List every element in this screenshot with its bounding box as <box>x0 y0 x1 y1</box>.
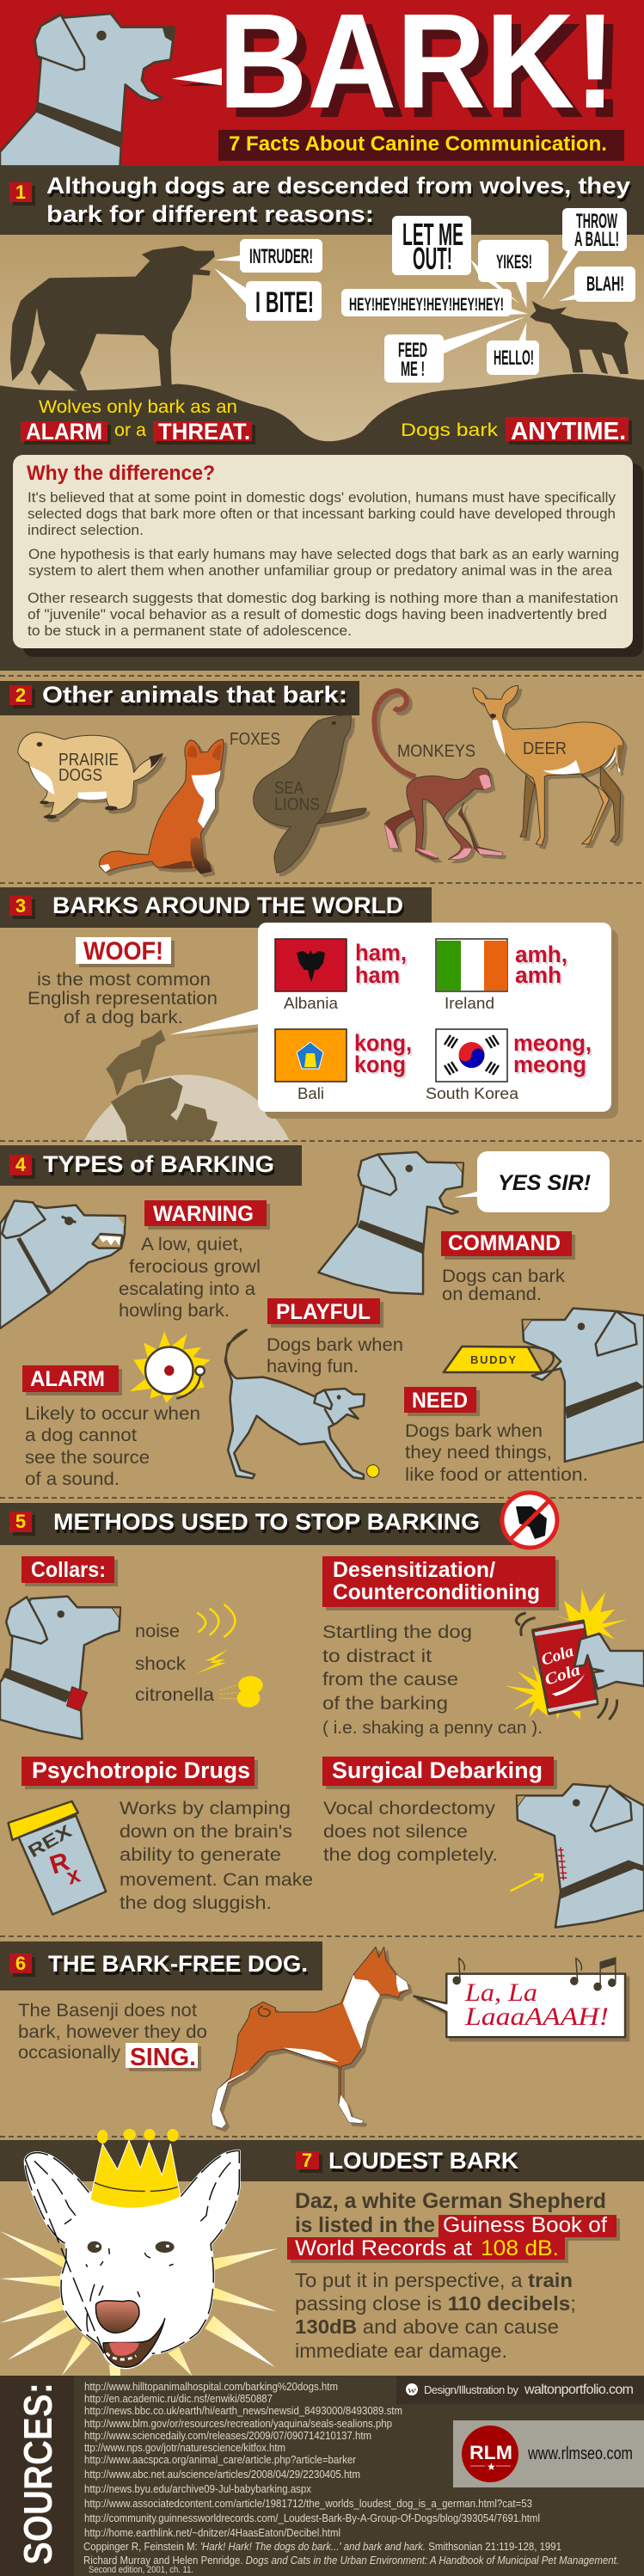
text: psychotropic drugs: movement. Can make <box>120 1870 313 1890</box>
flag: Bali: kong <box>354 1052 406 1077</box>
source list: http://news.byu.edu/archive09-Jul-babybarking.aspx <box>84 2482 311 2495</box>
number badge 6: 6 <box>15 1953 26 1974</box>
paragraph 2: system to alert them when another unfamiliar group or predatory animal was in the area <box>28 562 613 579</box>
caption: wolves: or a <box>114 420 146 440</box>
bubble: intruder: INTRUDER! <box>249 245 313 268</box>
text: alarm <box>25 1404 200 1489</box>
caption: wolves <box>21 397 252 445</box>
text: perspective <box>295 2269 576 2362</box>
collar type: noise <box>135 1604 235 1641</box>
number badge 1 <box>9 181 32 203</box>
text: alarm: Likely to occur when <box>25 1404 200 1424</box>
collar type: shock: shock <box>135 1654 187 1674</box>
section 6: the bark-free dog <box>0 1941 625 2128</box>
heading 5: METHODS USED TO STOP BARKING <box>53 1509 480 1535</box>
woof description <box>28 970 218 1027</box>
white shepherd head with crown <box>25 2129 239 2368</box>
section 1: wolves vs dogs <box>0 166 644 462</box>
text: warning <box>119 1235 261 1321</box>
heading 1 <box>46 173 630 227</box>
paragraph 2: One hypothesis is that early humans may have selected dogs that bark as an early warning <box>28 546 619 562</box>
caption: dogs: Dogs bark <box>401 420 499 440</box>
dog: surgical scar <box>511 1784 644 1928</box>
label: alarm: ALARM <box>30 1367 105 1391</box>
sources heading: SOURCES: <box>15 2383 60 2565</box>
bubble: hello <box>487 340 539 375</box>
bubble: yikes <box>478 240 549 282</box>
text: surgical debarking: the dog completely. <box>323 1845 498 1865</box>
source list: http://www.associatedcontent.com/article/1981712/the_worlds_loudest_dog_is_a_german.html?cat=53 <box>84 2497 532 2510</box>
section 3: barks around the world <box>0 887 618 1141</box>
highlight: guinness record: World Records at <box>295 2236 472 2260</box>
text: perspective: 130dB and above can cause <box>295 2315 559 2338</box>
bubble: feed me: FEED <box>398 339 427 362</box>
flag: South Korea: meong, <box>513 1030 592 1056</box>
paragraph 1 <box>28 489 616 538</box>
number badge 2 <box>9 684 32 706</box>
flag: Bali: Bali <box>297 1085 324 1102</box>
highlight: guinness record <box>287 2213 616 2260</box>
text: desensitization: Startling the dog <box>322 1622 472 1642</box>
source list: http://www.blm.gov/or/resources/recreation/yaquina/seals-sealions.php <box>84 2417 392 2430</box>
animal: prairie dog: PRAIRIE <box>58 751 119 770</box>
label: desensitization <box>322 1556 555 1607</box>
text: need: like food or attention. <box>405 1465 588 1485</box>
text: need <box>405 1421 588 1485</box>
flag: Ireland: amh <box>515 962 561 988</box>
hills <box>0 374 644 462</box>
text: surgical debarking: Vocal chordectomy <box>323 1799 496 1819</box>
paragraph 3: of "juvenile" vocal behavior as a result of domestic dogs having been inadvertently bred <box>28 606 607 623</box>
caption: wolves: Wolves only bark as an <box>39 397 237 417</box>
number badge 3: 3 <box>15 895 26 917</box>
label: desensitization: Desensitization/ <box>333 1558 495 1582</box>
card: barks by country <box>169 923 618 1119</box>
sponsor logo: RLM: RLM <box>469 2442 512 2463</box>
bubble: hey hey <box>341 289 512 316</box>
text: daz <box>295 2189 606 2237</box>
flag: Albania: ham <box>355 962 400 988</box>
icon: shaking penny can: Cola <box>543 1661 583 1690</box>
bubble: la la la: La, La <box>464 1978 537 2007</box>
label: warning: WARNING <box>153 1202 254 1226</box>
icon: barking dog <box>0 14 222 166</box>
paragraph 1: It's believed that at some point in domestic dogs' evolution, humans must have specifically <box>28 489 616 506</box>
number badge 2: 2 <box>15 684 26 706</box>
flag: Albania <box>275 939 407 1012</box>
animal: sea lion <box>254 715 366 873</box>
woof description: English representation <box>28 989 218 1009</box>
collar type: shock <box>135 1649 228 1674</box>
paragraph 1: indirect selection. <box>28 522 144 538</box>
text: surgical debarking <box>323 1799 498 1865</box>
text: psychotropic drugs: ability to generate <box>120 1845 281 1865</box>
text: psychotropic drugs: Works by clamping <box>120 1799 291 1819</box>
flag: South Korea <box>426 1029 592 1102</box>
subtitle: 7 Facts About Canine Communication. <box>229 132 607 156</box>
dog: need with tag <box>444 1309 644 1462</box>
text: alarm: a dog cannot <box>25 1426 137 1445</box>
text: perspective: immediate ear damage. <box>295 2340 507 2362</box>
flag: Bali: kong, <box>354 1030 412 1056</box>
number badge 4: 4 <box>15 1154 27 1175</box>
text: basenji: occasionally <box>18 2043 121 2063</box>
wolf silhouette <box>10 246 215 393</box>
bubble: i bite: I BITE! <box>255 286 314 319</box>
text: desensitization: from the cause <box>322 1670 458 1690</box>
source list: http://home.earthlink.net/~dnitzer/4HaasEaton/Decibel.html <box>84 2526 340 2539</box>
text: basenji: The Basenji does not <box>18 2001 197 2021</box>
text: warning: ferocious growl <box>129 1257 261 1277</box>
bubble: let me out <box>392 216 471 276</box>
animal: prairie dog: DOGS <box>58 766 102 785</box>
text: psychotropic drugs <box>120 1799 313 1913</box>
panel heading: Why the difference? <box>27 462 215 485</box>
bubble: yikes: YIKES! <box>496 251 532 273</box>
number badge 5 <box>9 1511 32 1532</box>
number badge 5: 5 <box>15 1511 26 1532</box>
callout: woof: WOOF! <box>83 937 163 966</box>
caption: wolves: ALARM <box>26 419 102 445</box>
woof description: is the most common <box>37 970 211 990</box>
animal: deer <box>473 685 623 845</box>
dog: playful with ball <box>225 1330 379 1479</box>
heading 3: BARKS AROUND THE WORLD <box>52 892 403 918</box>
animal: sea lion: LIONS <box>274 795 320 814</box>
text: basenji <box>18 2001 207 2071</box>
flag: Bali <box>275 1029 412 1102</box>
heading 2: Other animals that bark: <box>42 682 347 708</box>
flag: Albania: ham, <box>355 940 407 966</box>
icon: shaking penny can: Cola <box>539 1642 576 1670</box>
animal: prairie dog <box>18 733 163 819</box>
section 4: types of barking <box>0 1145 644 1489</box>
bubble: yes sir: YES SIR! <box>498 1171 591 1195</box>
heading 6: THE BARK-FREE DOG. <box>48 1951 308 1977</box>
text: warning: A low, quiet, <box>141 1235 243 1254</box>
number badge 1: 1 <box>15 181 26 203</box>
source list <box>83 2380 619 2575</box>
animal: fox: FOXES <box>230 730 280 749</box>
text: desensitization <box>322 1622 543 1738</box>
sponsor logo: RLM <box>453 2420 644 2487</box>
bubble: let me out: OUT! <box>413 241 452 276</box>
source list: http://www.hilltopanimalhospital.com/barking%20dogs.htm <box>84 2380 338 2393</box>
text: surgical debarking: does not silence <box>323 1822 468 1842</box>
label: command: COMMAND <box>448 1231 561 1255</box>
text: playful: having fun. <box>267 1357 359 1377</box>
number badge 3 <box>9 895 32 917</box>
number badge 6 <box>9 1953 32 1974</box>
text: desensitization: ( i.e. shaking a penny can ). <box>322 1719 543 1738</box>
icon: prescription bottle: R <box>46 1847 73 1880</box>
text: playful: Dogs bark when <box>267 1335 403 1355</box>
caption: dogs <box>401 417 629 445</box>
text: warning: escalating into a <box>119 1279 255 1299</box>
paragraph 3: to be stuck in a permanent state of adolescence. <box>28 623 352 639</box>
icon: no barking sign <box>502 1493 557 1548</box>
text: warning: howling bark. <box>119 1301 230 1321</box>
text: desensitization: of the barking <box>322 1694 448 1714</box>
woof description: of a dog bark. <box>64 1008 183 1027</box>
sponsor logo: RLM: ★ <box>487 2461 496 2473</box>
section 7: loudest bark <box>0 2129 644 2376</box>
highlight: guinness record: Guiness Book of <box>443 2213 607 2237</box>
paragraph 3 <box>28 590 618 639</box>
text: perspective: To put it in perspective, a train <box>295 2269 573 2291</box>
text: daz: Daz, a white German Shepherd <box>295 2189 606 2213</box>
speech bubble tails <box>214 249 580 354</box>
icon: prescription bottle <box>9 1801 106 1915</box>
text: basenji: bark, however they do <box>18 2022 207 2042</box>
bubble: la la la <box>414 1974 625 2037</box>
bubble: blah <box>574 267 635 302</box>
text: daz: is listed in the <box>295 2213 435 2237</box>
icon: prescription bottle: x <box>64 1861 83 1890</box>
animal: monkey <box>374 690 503 860</box>
panel: why the difference <box>0 455 644 671</box>
label: playful: PLAYFUL <box>276 1300 371 1324</box>
bubble: intruder <box>240 239 322 273</box>
bubble: i bite <box>246 281 322 321</box>
bubble: hey hey: HEY!HEY!HEY!HEY!HEY!HEY! <box>349 295 504 315</box>
source list: ttp://www.nps.gov/jotr/naturescience/kitfox.htm <box>84 2441 285 2454</box>
globe with howling dog <box>84 1029 290 1141</box>
flag: Ireland <box>436 939 567 1012</box>
dog: command <box>318 1152 463 1294</box>
icon: prescription bottle: REX <box>25 1821 75 1861</box>
animal: sea lion: SEA <box>274 779 304 798</box>
icon: alarm bell <box>130 1331 211 1403</box>
dog: warning <box>0 1201 126 1328</box>
label: surgical debarking: Surgical Debarking <box>332 1757 543 1783</box>
text: alarm: of a sound. <box>25 1469 120 1489</box>
flag: South Korea: South Korea <box>426 1085 519 1102</box>
bubble: feed me <box>384 334 444 383</box>
header banner <box>0 0 644 166</box>
sources footer <box>0 2376 644 2576</box>
text: desensitization: to distract it <box>322 1647 432 1666</box>
animal: monkey: MONKEYS <box>397 742 475 761</box>
flag: South Korea: meong <box>513 1052 586 1077</box>
heading 1: bark for different reasons: <box>46 201 374 227</box>
animal: fox <box>100 730 280 874</box>
paragraph 2 <box>28 546 619 579</box>
collar type: noise: noise <box>135 1622 180 1641</box>
bubble: feed me: ME ! <box>401 358 425 381</box>
heading 7: LOUDEST BARK <box>328 2148 519 2174</box>
number badge 4 <box>9 1154 32 1175</box>
section 2: other animals <box>0 681 623 874</box>
icon: shaking penny can <box>505 1589 644 1720</box>
animal: deer: DEER <box>523 739 567 758</box>
text: psychotropic drugs: the dog sluggish. <box>120 1893 272 1913</box>
icon: music notes <box>452 1957 616 1991</box>
text: alarm: see the source <box>25 1448 150 1468</box>
paragraph 3: Other research suggests that domestic dog barking is nothing more than a manifestation <box>28 590 618 606</box>
source list: http://community.guinnessworldrecords.com/_Loudest-Bark-By-A-Group-Of-Dogs/blog/393054/7691.html <box>84 2512 540 2524</box>
design credit: Design/Illustration by <box>424 2383 519 2396</box>
dog: basenji <box>212 1947 408 2128</box>
small dog silhouette <box>530 301 629 374</box>
label: need: NEED <box>412 1389 468 1413</box>
bubble: yes sir <box>454 1151 610 1212</box>
text: need: they need things, <box>405 1443 552 1463</box>
label: psychotropic drugs: Psychotropic Drugs <box>32 1757 250 1783</box>
source list: Coppinger R, Feinstein M: 'Hark! Hark! The dogs do bark...' and bark and hark. Smithsonian 21:119-128, 1991 <box>83 2540 561 2553</box>
collar type: citronella: citronella <box>135 1685 214 1705</box>
text: psychotropic drugs: down on the brain's <box>120 1822 292 1842</box>
subtitle <box>218 130 624 161</box>
design credit <box>396 2377 644 2404</box>
flag: Ireland: Ireland <box>445 995 494 1012</box>
heading 1: Although dogs are descended from wolves, they <box>46 173 630 199</box>
source list: http://www.abc.net.au/science/articles/2008/04/29/2230405.htm <box>84 2468 360 2481</box>
flag: Albania: Albania <box>284 995 339 1012</box>
number badge 7: 7 <box>302 2150 312 2171</box>
dog: collar <box>0 1597 120 1739</box>
label: desensitization: Counterconditioning <box>333 1580 540 1604</box>
highlight: guinness record: 108 dB. <box>481 2236 559 2260</box>
heading 4: TYPES of BARKING <box>43 1151 274 1177</box>
bubble: hello: HELLO! <box>494 347 534 370</box>
source list: http://www.sciencedaily.com/releases/2009/07/090714210137.htm <box>84 2429 371 2442</box>
text: command: Dogs can bark <box>442 1267 566 1286</box>
flag: Ireland: amh, <box>515 941 567 967</box>
design credit: waltonportfolio.com <box>524 2383 634 2397</box>
bubble: let me out: LET ME <box>402 217 463 252</box>
tag text: buddy: BUDDY <box>470 1353 516 1366</box>
collar type: citronella <box>135 1676 263 1708</box>
text: need: Dogs bark when <box>405 1421 543 1441</box>
section 5: methods to stop barking <box>0 1493 644 1928</box>
text: command <box>442 1267 566 1304</box>
text: perspective: passing close is 110 decibels ; <box>295 2292 576 2315</box>
caption: dogs: ANYTIME. <box>511 418 626 445</box>
number badge 7 <box>296 2150 319 2171</box>
label: collars: Collars: <box>31 1558 106 1582</box>
caption: wolves: THREAT. <box>158 419 250 445</box>
highlight: sing: SING. <box>130 2044 196 2071</box>
source list: Second edition, 2001, ch. 11. <box>89 2565 193 2575</box>
source list: http://news.bbc.co.uk/earth/hi/earth_news/newsid_8493000/8493089.stm <box>84 2404 402 2417</box>
design credit: w <box>408 2385 417 2395</box>
bubble: la la la: LaaaAAAH! <box>464 2003 609 2031</box>
text: playful <box>267 1335 403 1377</box>
source list: http://en.academic.ru/dic.nsf/enwiki/850887 <box>84 2392 273 2405</box>
text: command: on demand. <box>442 1285 542 1304</box>
source list: http://www.aacspca.org/animal_care/article.php?article=barker <box>84 2453 357 2466</box>
sunburst rays <box>0 2231 278 2376</box>
paragraph 1: selected dogs that bark more often or that incessant barking could have developed through <box>28 506 616 522</box>
bubble: throw a ball <box>562 208 627 251</box>
